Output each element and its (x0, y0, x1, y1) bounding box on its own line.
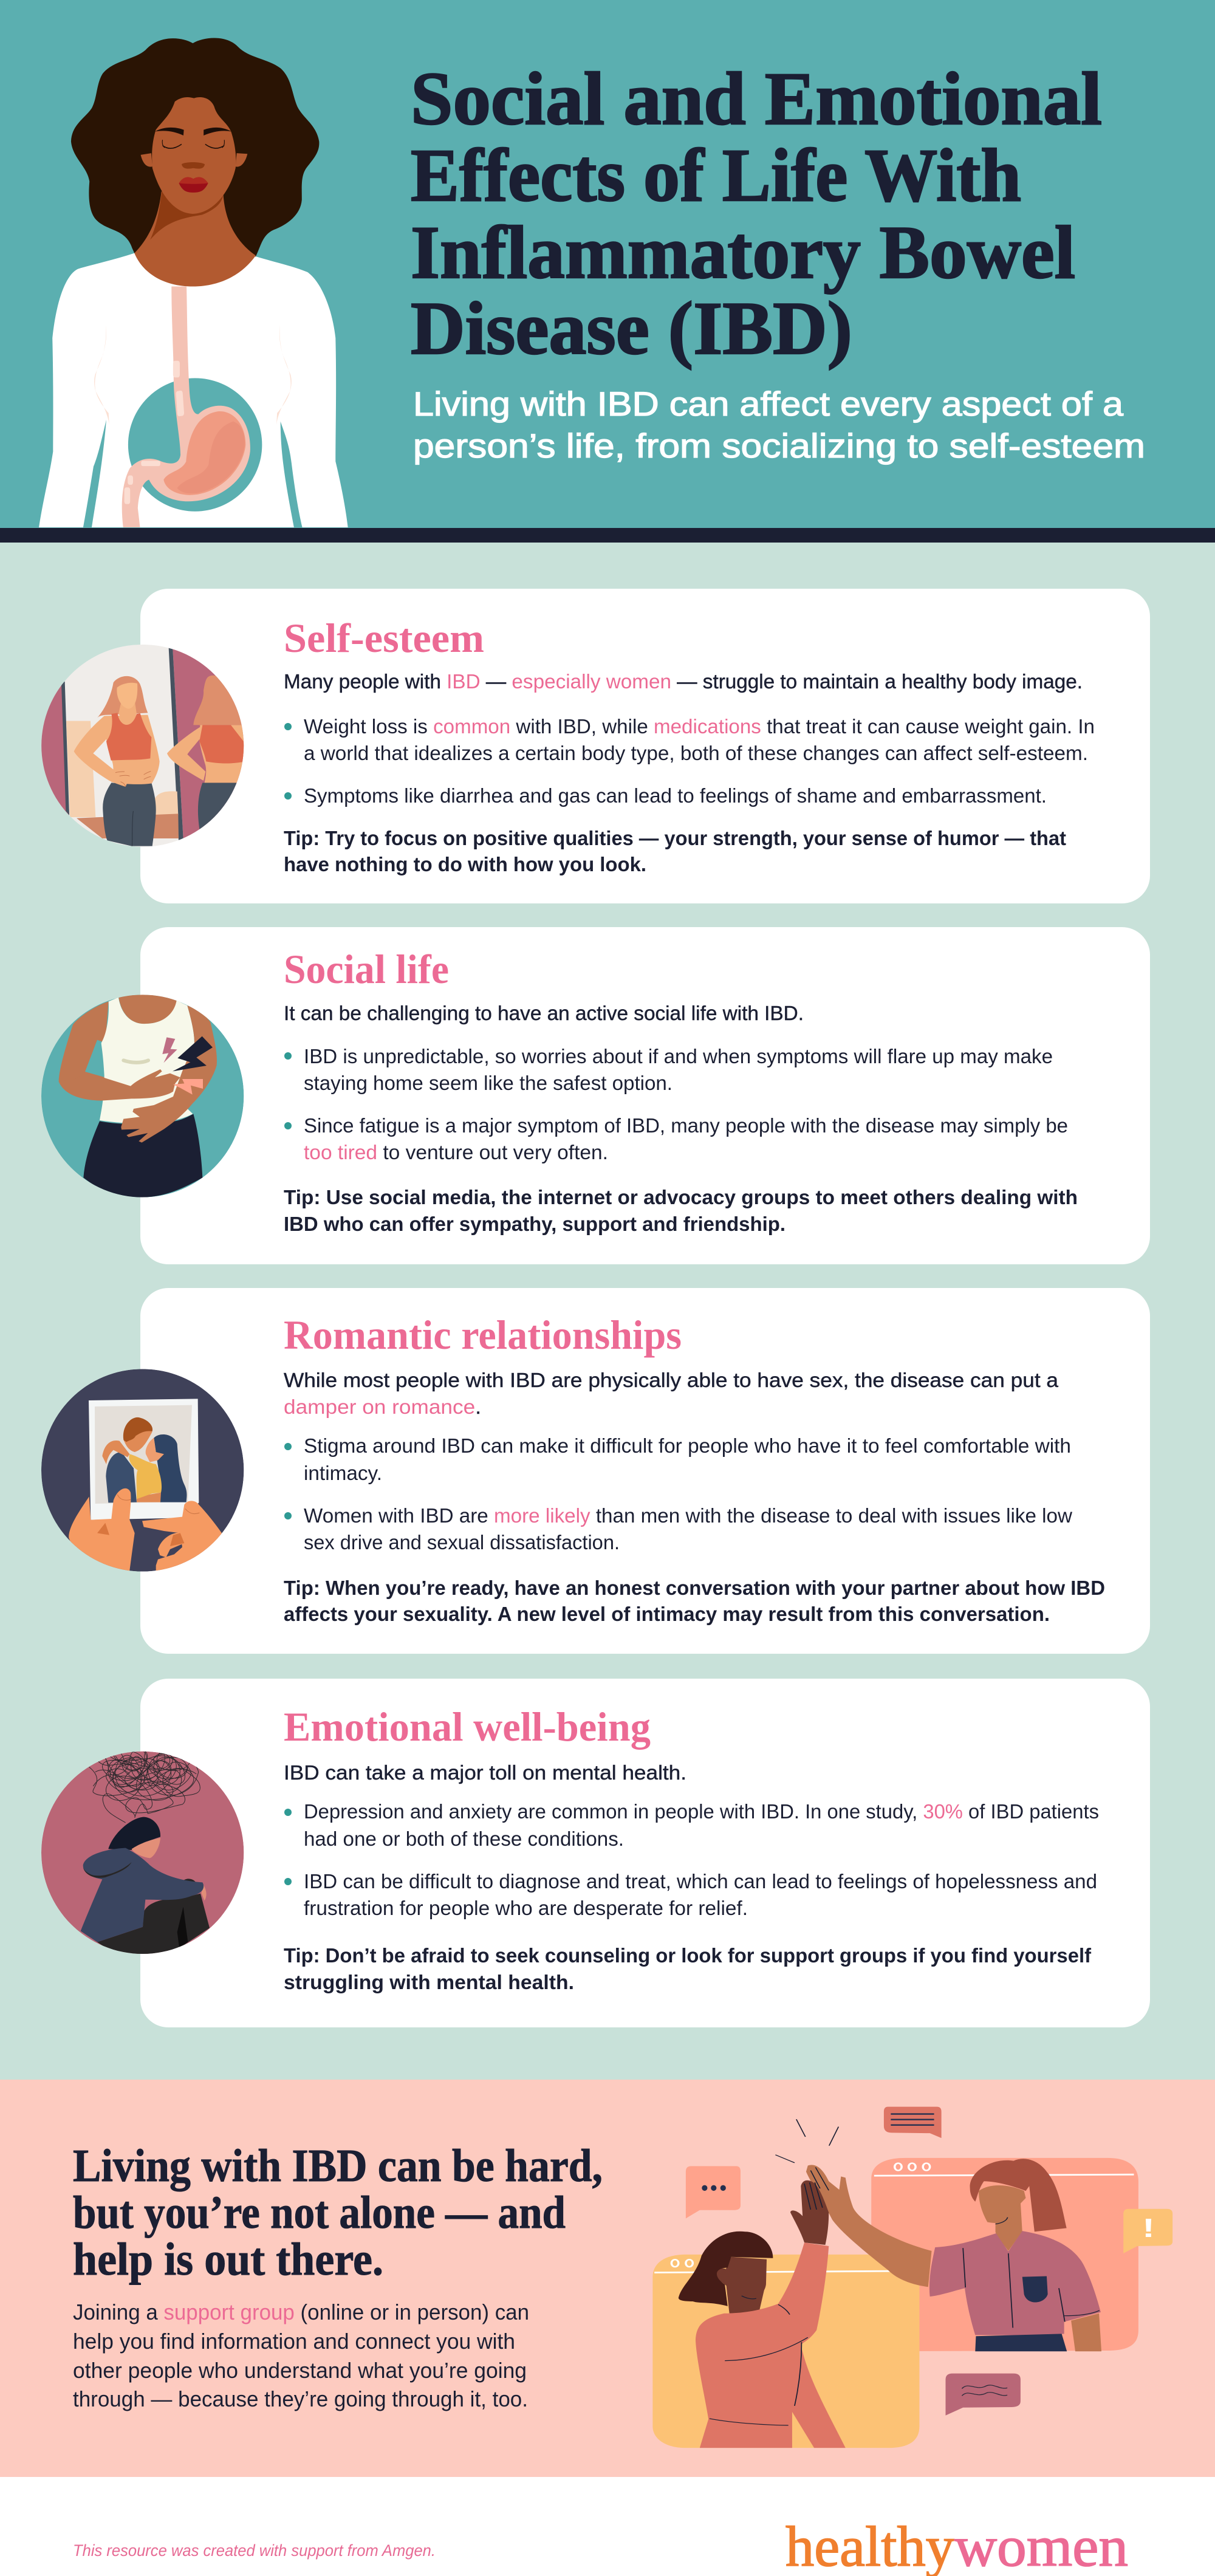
header panel (0, 0, 1215, 528)
heading: Social life (284, 946, 449, 992)
title: Effects of Life With (411, 134, 1021, 217)
bullet list: IBD is unpredictable, so worries about if and when symptoms will flare up may make (304, 1045, 1053, 1067)
tip (284, 827, 1066, 875)
heading: Romantic relationships (284, 1312, 682, 1358)
intro text: damper on romance . (284, 1396, 481, 1418)
bullet list: had one or both of these conditions. (304, 1828, 624, 1850)
title: Inflammatory Bowel (411, 211, 1075, 294)
bullet list: Women with IBD are more likely than men with the disease to deal with issues like low (304, 1504, 1072, 1527)
bullet list: staying home seem like the safest option. (304, 1072, 673, 1094)
illustration: woman with visible stomach (39, 38, 348, 527)
closing body text: help you find information and connect you with (73, 2329, 515, 2354)
bullet list: Depression and anxiety are common in people with IBD. In one study, 30% of IBD patients (304, 1800, 1099, 1823)
illustration: woman at mirror (36, 645, 247, 855)
tip: IBD who can offer sympathy, support and friendship. (284, 1213, 785, 1235)
bullet list: Since fatigue is a major symptom of IBD, many people with the disease may simply be (304, 1114, 1068, 1137)
tip (284, 1186, 1078, 1235)
heading: Emotional well-being (284, 1704, 651, 1750)
bullet list (284, 1434, 1072, 1553)
intro text: IBD can take a major toll on mental health. (284, 1761, 686, 1784)
closing body text: through — because they’re going through it, too. (73, 2386, 528, 2411)
closing heading: Living with IBD can be hard, (73, 2140, 603, 2191)
closing body text (73, 2300, 529, 2411)
illustration: hands holding couple photo (41, 1369, 244, 1574)
bullet list: Stigma around IBD can make it difficult for people who have it to feel comfortable with (304, 1434, 1071, 1457)
footer panel (0, 2477, 1215, 2576)
closing heading: help is out there. (73, 2234, 383, 2285)
intro text: While most people with IBD are physically able to have sex, the disease can put a (284, 1369, 1059, 1391)
intro text: Many people with IBD — especially women — struggle to maintain a healthy body image. (284, 670, 1083, 693)
tip (284, 1577, 1105, 1625)
bullet list (284, 1800, 1099, 1919)
title: Disease (IBD) (411, 287, 852, 370)
credit line: This resource was created with support from Amgen. (73, 2541, 436, 2560)
panel: romantic relationships (41, 1288, 1150, 1654)
tip: struggling with mental health. (284, 1971, 574, 1993)
tip: Tip: Don’t be afraid to seek counseling or look for support groups if you find yourself (284, 1944, 1092, 1967)
closing heading (73, 2140, 603, 2285)
logo: healthywomen (785, 2515, 1128, 2576)
subtitle: Living with IBD can affect every aspect of a (413, 385, 1124, 423)
heading: Self-esteem (284, 615, 484, 661)
panel: emotional well-being (41, 1679, 1150, 2027)
tip: Tip: Try to focus on positive qualities — your strength, your sense of humor — that (284, 827, 1066, 849)
panel: closing message (0, 2080, 1215, 2477)
intro text: It can be challenging to have an active social life with IBD. (284, 1002, 804, 1024)
bullet list: intimacy. (304, 1462, 382, 1484)
intro text (284, 1369, 1059, 1418)
mint background section (0, 543, 1215, 2080)
subtitle: person’s life, from socializing to self-esteem (413, 426, 1145, 465)
title (411, 57, 1102, 370)
title: Social and Emotional (411, 57, 1102, 140)
closing body text: Joining a support group (online or in person) can (73, 2300, 529, 2324)
illustration: seated person with tangled thoughts (41, 1750, 244, 1956)
bullet list: Symptoms like diarrhea and gas can lead to feelings of shame and embarrassment. (304, 784, 1047, 807)
subtitle (413, 385, 1145, 465)
panel: self-esteem (36, 589, 1150, 903)
bullet list: sex drive and sexual dissatisfaction. (304, 1531, 620, 1553)
dark divider bar (0, 528, 1215, 543)
tip: Tip: Use social media, the internet or advocacy groups to meet others dealing with (284, 1186, 1078, 1208)
bullet list (284, 1045, 1068, 1163)
closing heading: but you’re not alone — and (73, 2187, 566, 2238)
bullet list (284, 715, 1095, 807)
closing body text: other people who understand what you’re going (73, 2358, 527, 2383)
tip: affects your sexuality. A new level of intimacy may result from this conversation. (284, 1603, 1050, 1625)
tip (284, 1944, 1092, 1993)
illustration: person holding stomach (41, 992, 244, 1197)
tip: have nothing to do with how you look. (284, 853, 646, 875)
tip: Tip: When you’re ready, have an honest conversation with your partner about how IBD (284, 1577, 1105, 1599)
bullet list: Weight loss is common with IBD, while medications that treat it can cause weight gain. In (304, 715, 1095, 738)
illustration: high five across video windows: ! (1142, 2213, 1155, 2243)
bullet list: too tired to venture out very often. (304, 1141, 608, 1163)
bullet list: frustration for people who are desperate for relief. (304, 1897, 748, 1919)
panel: social life (41, 927, 1150, 1264)
bullet list: IBD can be difficult to diagnose and treat, which can lead to feelings of hopelessness and (304, 1870, 1097, 1893)
illustration: high five across video windows (652, 2107, 1172, 2448)
bullet list: a world that idealizes a certain body type, both of these changes can affect self-esteem. (304, 742, 1088, 764)
